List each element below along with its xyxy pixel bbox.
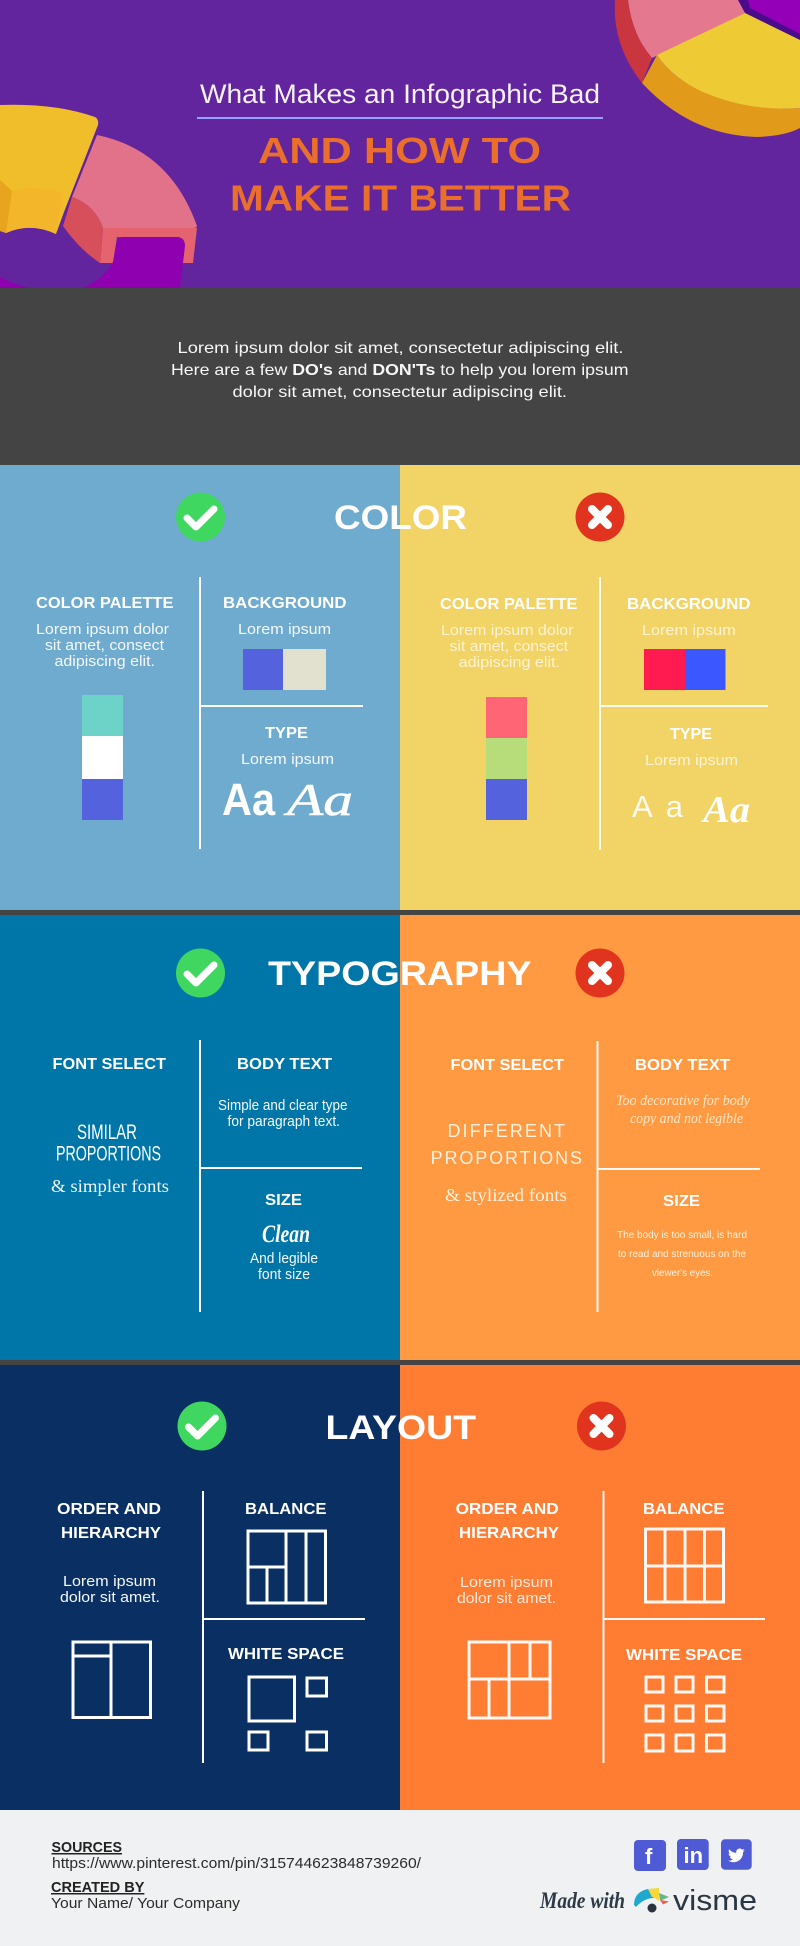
- title: main heading: [230, 130, 571, 218]
- icon: red cross: [577, 1402, 626, 1450]
- text: font select do: [51, 1056, 169, 1196]
- text: order and hierarchy dont: Lorem ipsum: [460, 1575, 553, 1591]
- text: created by: [51, 1879, 241, 1912]
- text: font select do: SIMILAR: [77, 1121, 137, 1144]
- type samples dont: Aa: [701, 789, 750, 831]
- title underline: [197, 117, 603, 119]
- text: font select do: & simpler fonts: [51, 1176, 169, 1196]
- decoration: right 3D donut chart: [615, 0, 800, 137]
- text: font select dont: DIFFERENT: [448, 1121, 565, 1141]
- panel: footer: [0, 1810, 800, 1946]
- text: font select do: FONT SELECT: [52, 1056, 166, 1073]
- heading: balance dont: BALANCE: [643, 1501, 725, 1518]
- text: color palette do: sit amet, consect: [45, 638, 164, 654]
- text: background dont: Lorem ipsum: [642, 623, 736, 639]
- text: order and hierarchy do: HIERARCHY: [61, 1525, 161, 1542]
- icon: hierarchy layout dont: [469, 1642, 550, 1718]
- text: size do: SIZE: [265, 1192, 302, 1209]
- text: color palette dont: Lorem ipsum dolor: [441, 623, 574, 639]
- icon: linkedin: [677, 1839, 709, 1870]
- text: size dont: [617, 1193, 747, 1279]
- text: made with: Made with: [539, 1888, 625, 1913]
- panel: typography section: [0, 915, 800, 1365]
- text: font select dont: [431, 1057, 582, 1205]
- text: order and hierarchy do: dolor sit amet.: [60, 1590, 160, 1606]
- text: type do: TYPE: [265, 725, 308, 742]
- text: size dont: viewer's eyes.: [652, 1267, 713, 1279]
- text: sources: https://www.pinterest.com/pin/315744623848739260/: [52, 1855, 422, 1872]
- text: type do: [241, 725, 334, 768]
- icon: twitter: [721, 1839, 752, 1870]
- text: color palette dont: adipiscing elit.: [459, 655, 560, 671]
- type samples dont: Aa: [632, 789, 684, 824]
- swatches: background do: [243, 649, 326, 690]
- text: sources: SOURCES: [52, 1839, 122, 1856]
- dividers: layout dont: [604, 1491, 765, 1763]
- text: created by: Your Name/ Your Company: [51, 1895, 241, 1912]
- swatches: palette dont: [486, 697, 527, 820]
- dividers: color dont: [600, 577, 768, 850]
- text: order and hierarchy dont: HIERARCHY: [459, 1525, 559, 1542]
- heading: layout: LAYOUT: [326, 1409, 476, 1447]
- text: size dont: to read and strenuous on the: [618, 1248, 746, 1260]
- dividers: color do: [200, 577, 363, 849]
- text: color palette dont: sit amet, consect: [450, 639, 568, 655]
- decoration: left 3D donut chart: [0, 105, 197, 288]
- heading: typography: TYPOGRAPHY: [268, 955, 532, 993]
- panel: intro text: dolor sit amet, consectetur adipiscing elit.: [232, 384, 567, 401]
- text: color palette do: [36, 595, 174, 670]
- panel: color section: [0, 465, 800, 915]
- type samples do: Aa: [283, 774, 353, 825]
- text: order and hierarchy do: ORDER AND: [57, 1501, 161, 1518]
- icon: red cross: [576, 948, 624, 998]
- heading: color: COLOR: [334, 499, 467, 537]
- icon: red cross: [576, 492, 624, 542]
- panel: hero header: [0, 0, 800, 288]
- text: color palette dont: [440, 596, 578, 671]
- text: color palette do: Lorem ipsum dolor: [36, 622, 169, 638]
- title: subtitle line: What Makes an Infographic Bad: [200, 79, 600, 109]
- icon: linkedin: in: [684, 1843, 703, 1868]
- title: main heading: MAKE IT BETTER: [230, 178, 571, 218]
- heading: balance do: BALANCE: [245, 1501, 327, 1518]
- text: size do: And legible: [250, 1251, 318, 1267]
- text: body text dont: [616, 1057, 750, 1127]
- icon: green check: [176, 492, 225, 542]
- type samples dont: [632, 789, 750, 831]
- text: body text do: Simple and clear type: [218, 1098, 348, 1114]
- logo: visme wordmark: visme: [673, 1885, 757, 1917]
- text: size dont: The body is too small, is hard: [617, 1229, 747, 1241]
- text: font select do: PROPORTIONS: [56, 1142, 161, 1166]
- text: order and hierarchy dont: dolor sit amet.: [457, 1591, 556, 1607]
- text: body text dont: Too decorative for body: [616, 1093, 750, 1109]
- text: order and hierarchy dont: [456, 1501, 559, 1607]
- text: background do: [223, 595, 346, 638]
- text: color palette do: COLOR PALETTE: [36, 595, 174, 612]
- text: type do: Lorem ipsum: [241, 752, 334, 768]
- icon: facebook: f: [645, 1844, 653, 1869]
- text: size do: font size: [258, 1267, 310, 1283]
- type samples do: [222, 774, 353, 825]
- icon: white space do: [249, 1677, 326, 1750]
- panel: intro text: [0, 288, 800, 465]
- text: order and hierarchy do: Lorem ipsum: [63, 1574, 156, 1590]
- text: type dont: Lorem ipsum: [645, 753, 738, 769]
- icon: white space dont: [646, 1677, 724, 1751]
- swatches: palette do: [82, 695, 123, 820]
- text: background do: Lorem ipsum: [238, 622, 331, 638]
- icon: green check: [176, 948, 225, 998]
- dividers: typography do: [200, 1040, 362, 1312]
- text: color palette do: adipiscing elit.: [54, 654, 155, 670]
- panel: layout section: [0, 1365, 800, 1810]
- text: type dont: TYPE: [670, 726, 712, 743]
- heading: white space do: WHITE SPACE: [228, 1646, 344, 1663]
- dividers: layout do: [203, 1491, 365, 1763]
- heading: white space dont: WHITE SPACE: [626, 1647, 742, 1664]
- text: body text do: for paragraph text.: [228, 1114, 340, 1130]
- text: type dont: [645, 726, 738, 769]
- panel: intro text: Lorem ipsum dolor sit amet, consectetur adipiscing elit.: [178, 340, 624, 357]
- icon: facebook: [634, 1840, 666, 1871]
- text: size do: Clean: [262, 1221, 310, 1248]
- text: background dont: BACKGROUND: [627, 596, 750, 613]
- text: size do: [250, 1192, 318, 1283]
- title: main heading: AND HOW TO: [258, 130, 541, 171]
- swatches: background dont: [644, 649, 726, 690]
- text: color palette dont: COLOR PALETTE: [440, 596, 578, 613]
- text: created by: CREATED BY: [51, 1879, 144, 1896]
- icon: balance layout do: [248, 1531, 326, 1603]
- text: body text do: BODY TEXT: [237, 1056, 332, 1073]
- type samples do: Aa: [222, 774, 276, 825]
- text: font select dont: & stylized fonts: [445, 1185, 567, 1205]
- icon: hierarchy layout do: [73, 1642, 150, 1718]
- icon: balance layout dont: [646, 1529, 724, 1602]
- text: font select dont: FONT SELECT: [450, 1057, 564, 1074]
- text: size dont: SIZE: [663, 1193, 700, 1210]
- text: body text do: [218, 1056, 348, 1130]
- text: order and hierarchy do: [57, 1501, 161, 1606]
- icon: green check: [178, 1402, 226, 1450]
- dividers: typography dont: [598, 1041, 760, 1312]
- text: font select dont: PROPORTIONS: [431, 1148, 582, 1168]
- text: sources: [52, 1839, 422, 1872]
- panel: intro text: Here are a few DO's and DON'Ts to help you lorem ipsum: [171, 362, 628, 379]
- text: order and hierarchy dont: ORDER AND: [456, 1501, 559, 1518]
- text: body text dont: BODY TEXT: [635, 1057, 730, 1074]
- text: background do: BACKGROUND: [223, 595, 346, 612]
- text: background dont: [627, 596, 750, 639]
- text: body text dont: copy and not legible: [630, 1111, 743, 1127]
- logo: visme mark: [634, 1888, 669, 1912]
